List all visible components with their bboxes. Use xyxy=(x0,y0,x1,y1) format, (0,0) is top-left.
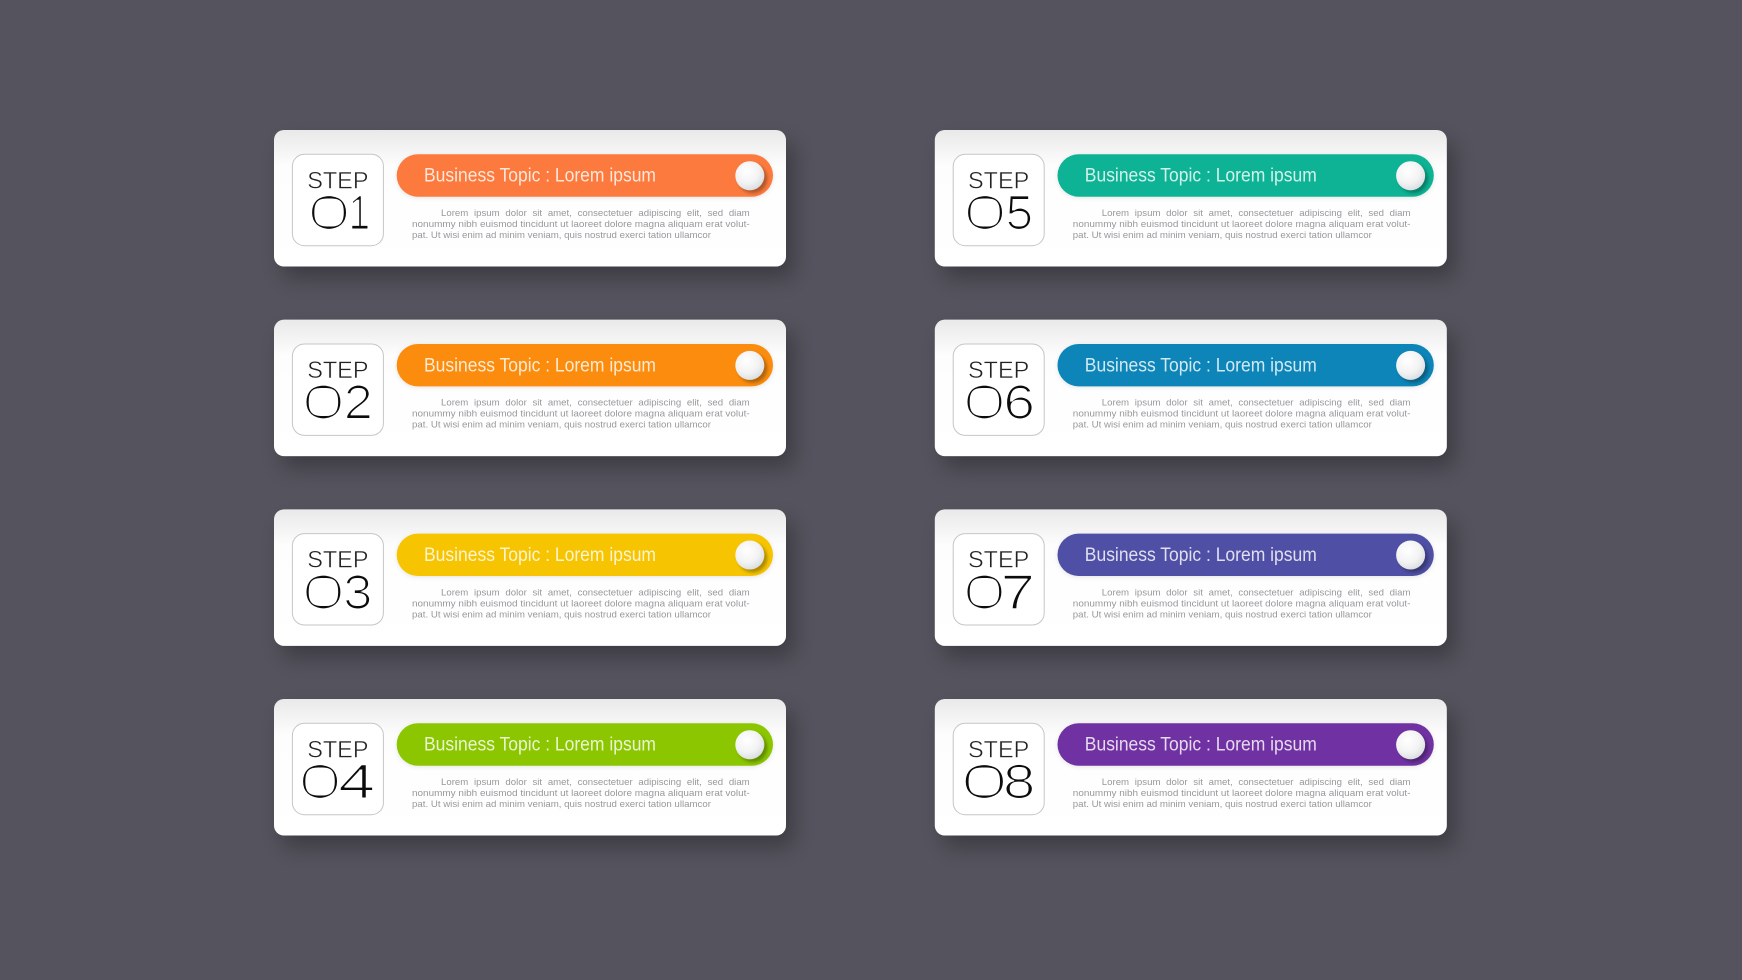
title pill 03 xyxy=(397,534,773,576)
description 07: Lorem ipsum dolor sit amet, consectetuer adipiscing elit, sed diam xyxy=(1102,587,1411,598)
step badge 07: 7 xyxy=(1001,565,1035,619)
description 01: Lorem ipsum dolor sit amet, consectetuer adipiscing elit, sed diam xyxy=(441,208,750,219)
description 07: nonummy nibh euismod tincidunt ut laoreet dolore magna aliquam erat volut- xyxy=(1073,598,1410,609)
step badge 03: 3 xyxy=(343,565,372,619)
title pill 04: Business Topic : Lorem ipsum xyxy=(424,735,656,756)
step badge 08: 0 xyxy=(960,755,1009,809)
title pill 05: Business Topic : Lorem ipsum xyxy=(1085,166,1317,187)
step badge 06: STEP xyxy=(968,357,1029,384)
description 04: nonummy nibh euismod tincidunt ut laoreet dolore magna aliquam erat volut- xyxy=(412,788,750,799)
title pill 03: Business Topic : Lorem ipsum xyxy=(424,545,656,566)
step badge 08: 8 xyxy=(1003,756,1035,809)
step badge 02 xyxy=(292,344,383,435)
title pill 01 xyxy=(397,154,773,197)
description 03 xyxy=(412,587,750,620)
description 06: Lorem ipsum dolor sit amet, consectetuer adipiscing elit, sed diam xyxy=(1102,398,1411,409)
description 01: nonummy nibh euismod tincidunt ut laoreet dolore magna aliquam erat volut- xyxy=(412,219,750,230)
description 02: Lorem ipsum dolor sit amet, consectetuer adipiscing elit, sed diam xyxy=(441,398,750,409)
step badge 03: STEP xyxy=(307,547,368,574)
step badge 04 xyxy=(292,723,383,815)
description 03: nonummy nibh euismod tincidunt ut laoreet dolore magna aliquam erat volut- xyxy=(412,598,750,609)
step badge 07 xyxy=(953,534,1044,625)
title pill 02 xyxy=(397,344,773,386)
step badge 07: STEP xyxy=(968,547,1029,574)
step badge 05: 0 xyxy=(962,186,1008,240)
title pill 08: Business Topic : Lorem ipsum xyxy=(1085,735,1317,756)
description 05: pat. Ut wisi enim ad minim veniam, quis nostrud exerci tation ullamcor xyxy=(1073,230,1372,241)
step badge 01: 0 xyxy=(306,186,352,240)
title pill 08 xyxy=(1058,723,1434,766)
description 06: pat. Ut wisi enim ad minim veniam, quis nostrud exerci tation ullamcor xyxy=(1073,420,1372,431)
step badge 01: 1 xyxy=(348,187,370,240)
step badge 06: 0 xyxy=(962,376,1007,429)
panel: step 05 xyxy=(935,130,1447,266)
step badge 05: STEP xyxy=(968,167,1029,194)
description 02: pat. Ut wisi enim ad minim veniam, quis nostrud exerci tation ullamcor xyxy=(412,420,711,431)
step badge 07: 0 xyxy=(962,565,1007,619)
description 06 xyxy=(1073,398,1411,431)
step badge 02: 2 xyxy=(344,375,373,429)
step badge 02: 0 xyxy=(301,376,346,429)
title pill 07 xyxy=(1058,534,1434,576)
step badge 01: STEP xyxy=(307,167,368,194)
step badge 08 xyxy=(953,723,1044,815)
step badge 06: 6 xyxy=(1003,376,1035,430)
step badge 08: STEP xyxy=(968,736,1029,763)
description 05 xyxy=(1073,208,1411,241)
step badge 05 xyxy=(953,154,1044,246)
description 08: pat. Ut wisi enim ad minim veniam, quis nostrud exerci tation ullamcor xyxy=(1073,799,1372,810)
description 01: pat. Ut wisi enim ad minim veniam, quis nostrud exerci tation ullamcor xyxy=(412,230,711,241)
description 05: Lorem ipsum dolor sit amet, consectetuer adipiscing elit, sed diam xyxy=(1102,208,1411,219)
step badge 04: 0 xyxy=(297,755,343,809)
panel: step 06 xyxy=(935,320,1447,456)
description 08: Lorem ipsum dolor sit amet, consectetuer adipiscing elit, sed diam xyxy=(1102,777,1411,788)
panel: step 04 xyxy=(274,699,786,836)
title pill 06 xyxy=(1058,344,1434,386)
title pill 05 xyxy=(1058,154,1434,197)
step badge 05: 5 xyxy=(1005,187,1033,240)
description 08: nonummy nibh euismod tincidunt ut laoreet dolore magna aliquam erat volut- xyxy=(1073,788,1410,799)
description 03: Lorem ipsum dolor sit amet, consectetuer adipiscing elit, sed diam xyxy=(441,587,750,598)
step badge 04: 4 xyxy=(338,756,375,809)
description 02 xyxy=(412,398,750,431)
panel: step 01 xyxy=(274,130,786,266)
step badge 03: 0 xyxy=(301,565,346,619)
panel: step 03 xyxy=(274,509,786,646)
title pill 04 xyxy=(397,723,773,766)
title pill 02: Business Topic : Lorem ipsum xyxy=(424,355,656,376)
description 05: nonummy nibh euismod tincidunt ut laoreet dolore magna aliquam erat volut- xyxy=(1073,219,1410,230)
description 03: pat. Ut wisi enim ad minim veniam, quis nostrud exerci tation ullamcor xyxy=(412,609,711,620)
title pill 07: Business Topic : Lorem ipsum xyxy=(1085,545,1317,566)
title pill 01: Business Topic : Lorem ipsum xyxy=(424,166,656,187)
description 04 xyxy=(412,777,750,810)
description 04: Lorem ipsum dolor sit amet, consectetuer adipiscing elit, sed diam xyxy=(441,777,750,788)
step badge 02: STEP xyxy=(307,357,368,384)
description 08 xyxy=(1073,777,1411,810)
panel: step 02 xyxy=(274,320,786,456)
description 02: nonummy nibh euismod tincidunt ut laoreet dolore magna aliquam erat volut- xyxy=(412,409,750,420)
description 06: nonummy nibh euismod tincidunt ut laoreet dolore magna aliquam erat volut- xyxy=(1073,409,1410,420)
step badge 01 xyxy=(292,154,383,246)
step badge 03 xyxy=(292,534,383,625)
title pill 06: Business Topic : Lorem ipsum xyxy=(1085,355,1317,376)
panel: step 07 xyxy=(935,509,1447,646)
description 01 xyxy=(412,208,750,241)
step badge 04: STEP xyxy=(307,736,368,763)
description 04: pat. Ut wisi enim ad minim veniam, quis nostrud exerci tation ullamcor xyxy=(412,799,711,810)
description 07 xyxy=(1073,587,1411,620)
panel: step 08 xyxy=(935,699,1447,836)
step badge 06 xyxy=(953,344,1044,435)
description 07: pat. Ut wisi enim ad minim veniam, quis nostrud exerci tation ullamcor xyxy=(1073,609,1372,620)
